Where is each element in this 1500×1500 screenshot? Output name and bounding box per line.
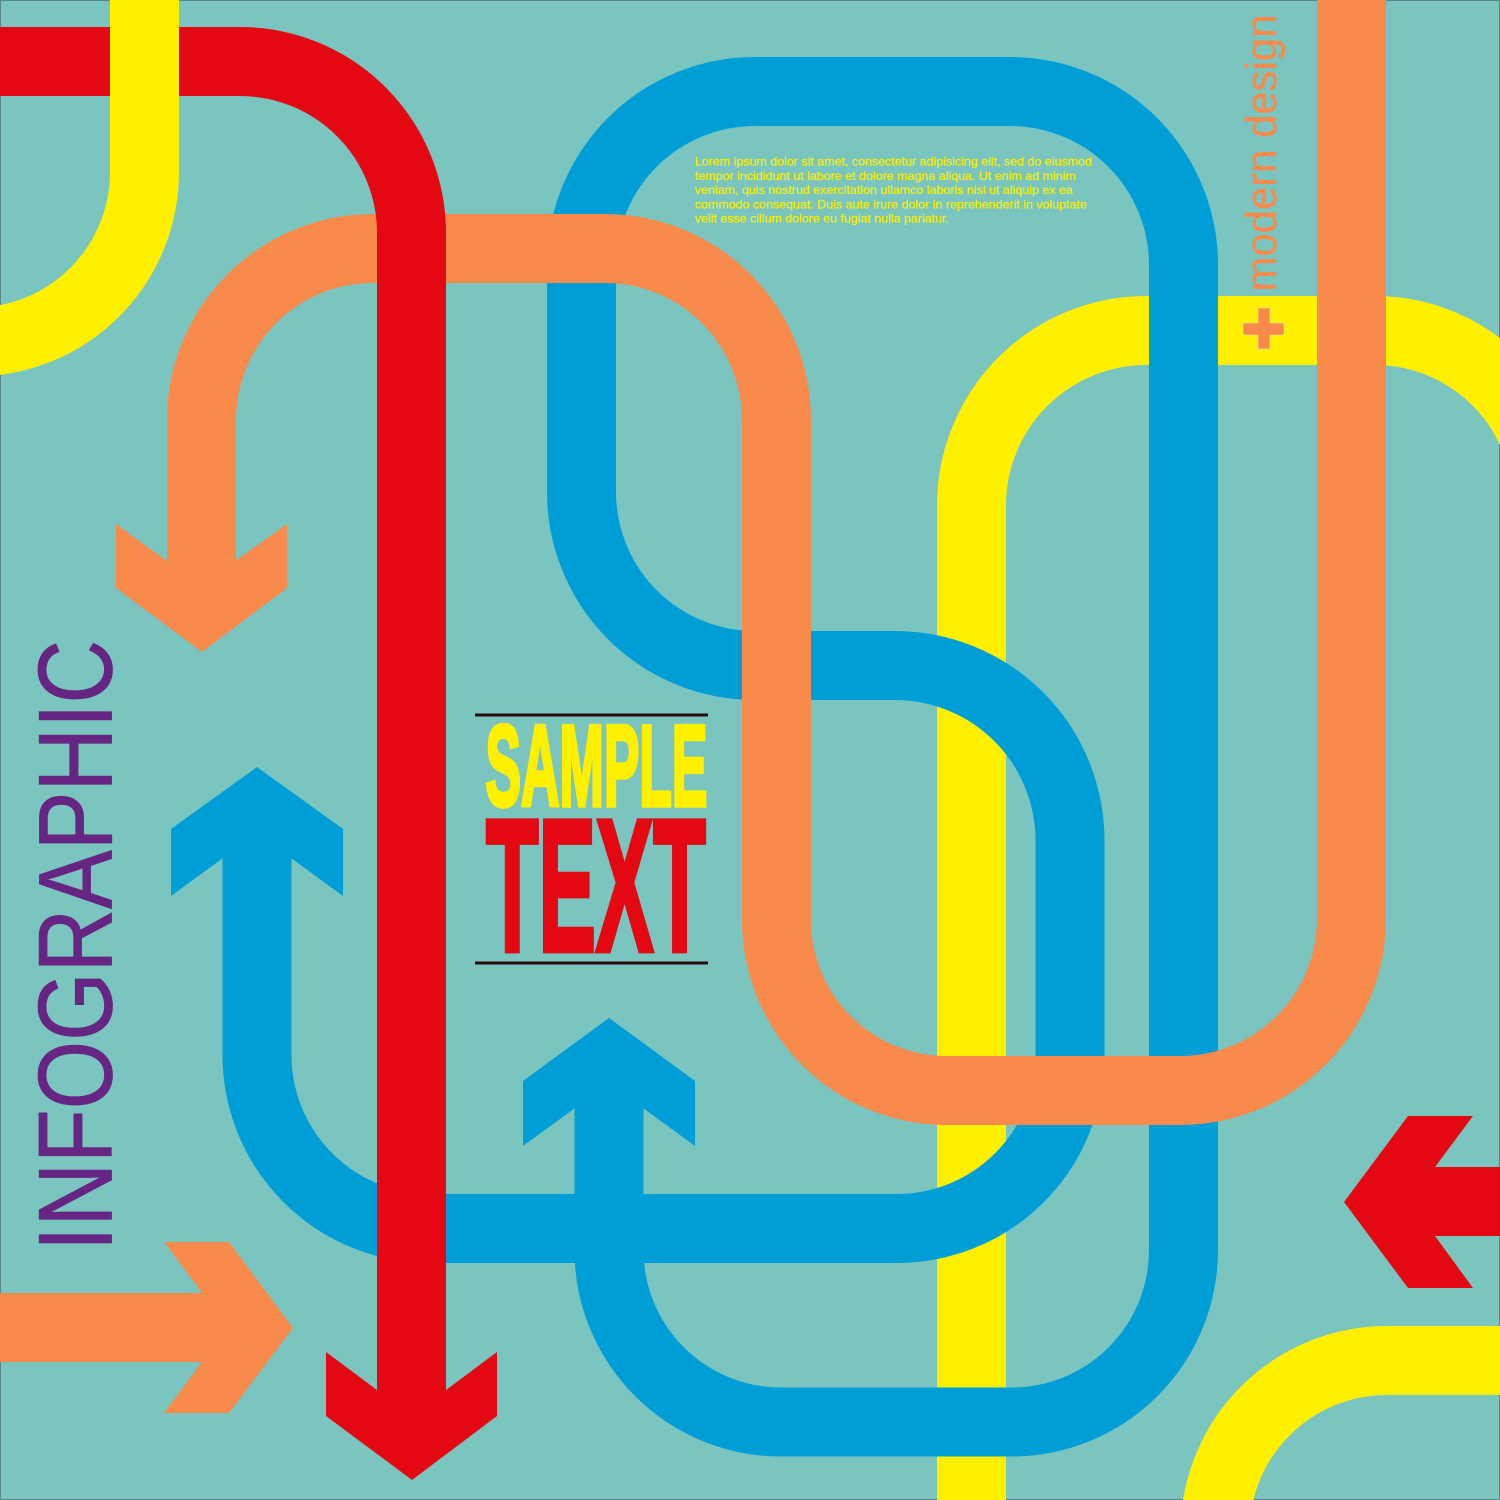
vertical label: modern design: modern design	[1237, 14, 1286, 292]
yellow road: centre vertical, looping right	[972, 330, 1500, 1500]
arrow: red pointing left	[1344, 1116, 1500, 1288]
body text block	[695, 154, 1092, 226]
body text block: velit esse cillum dolore eu fugiat nulla pariatur.	[695, 212, 949, 226]
rule: bottom	[475, 962, 708, 964]
headline: SAMPLE: SAMPLE	[486, 701, 707, 830]
arrow: orange pointing right	[0, 1242, 293, 1413]
yellow road: bottom right corner	[1215, 1360, 1500, 1500]
body text block: tempor incididunt ut labore et dolore magna aliqua. Ut enim ad minim	[695, 169, 1076, 183]
body text block: Lorem ipsum dolor sit amet, consectetur adipisicing elit, sed do eiusmod	[695, 154, 1092, 168]
arrowhead: blue left pointing up	[171, 767, 343, 896]
rule: top	[475, 714, 708, 716]
blue arrow road: long winding loop	[171, 92, 1184, 1422]
headline: TEXT: TEXT	[486, 782, 706, 992]
vertical title: INFOGRAPHIC: INFOGRAPHIC	[18, 640, 134, 1251]
arrowhead: red pointing down	[326, 1352, 497, 1480]
body text block: veniam, quis nostrud exercitation ullamco laboris nisi ut aliquip ex ea	[695, 183, 1073, 197]
yellow road: top left corner	[0, 0, 144, 342]
red arrow road	[0, 62, 497, 1480]
orange arrow road	[116, 0, 1352, 1090]
arrowhead: orange pointing down	[116, 524, 287, 652]
arrowhead: blue centre pointing up	[523, 1018, 695, 1146]
icon: plus sign	[1243, 308, 1284, 349]
title block: sample text	[475, 701, 708, 992]
body text block: commodo consequat. Duis aute irure dolor in reprehenderit in voluptate	[695, 198, 1087, 212]
